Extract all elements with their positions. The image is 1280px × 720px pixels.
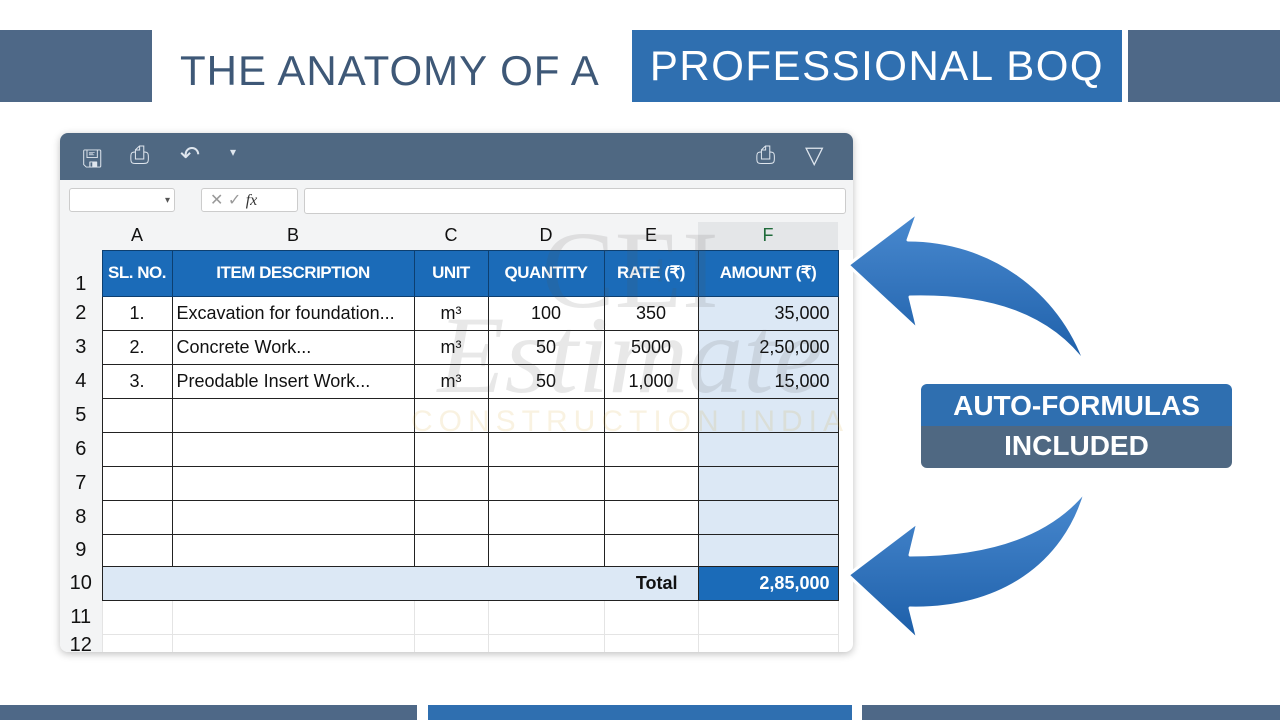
grid: RATE (₹) xyxy=(617,263,685,282)
grid: Preodable Insert Work... xyxy=(176,370,370,390)
grid: 2. xyxy=(129,336,144,356)
toolbar: ▾ xyxy=(230,145,236,159)
title highlight box xyxy=(632,30,1122,102)
spreadsheet window xyxy=(60,133,853,652)
grid: 3. xyxy=(129,370,144,390)
grid: 350 xyxy=(636,302,666,322)
toolbar: ⎙ xyxy=(130,142,149,169)
grid: 1 xyxy=(75,273,86,295)
grid: 8 xyxy=(75,506,86,528)
grid: 50 xyxy=(536,370,556,390)
toolbar: ▽ xyxy=(805,142,823,169)
toolbar: 🖫 xyxy=(82,146,102,173)
watermark xyxy=(411,209,849,438)
grid: Total xyxy=(636,572,678,592)
grid xyxy=(60,222,853,652)
grid: m³ xyxy=(440,336,462,356)
grid: QUANTITY xyxy=(505,263,587,282)
grid: 5 xyxy=(75,404,86,426)
toolbar: ↶ xyxy=(180,142,200,169)
formula bar: ✕ ✓ fx xyxy=(210,192,257,209)
arrow: lower xyxy=(848,490,1086,640)
arrows xyxy=(850,216,1082,636)
grid: m³ xyxy=(440,302,462,322)
grid: A xyxy=(131,225,143,245)
grid: 35,000 xyxy=(774,302,830,322)
grid: 2,85,000 xyxy=(759,572,830,592)
grid: SL. NO. xyxy=(108,263,166,282)
grid: ITEM DESCRIPTION xyxy=(216,263,370,282)
grid: 11 xyxy=(70,606,91,628)
grid: 50 xyxy=(536,336,556,356)
grid: 100 xyxy=(531,302,561,322)
grid: Excavation for foundation... xyxy=(176,302,395,322)
grid: 10 xyxy=(70,572,92,594)
title highlight box: PROFESSIONAL BOQ xyxy=(650,42,1104,89)
formula bar xyxy=(60,180,853,222)
grid: 1. xyxy=(129,302,144,322)
badge: auto-formulas: INCLUDED xyxy=(1004,430,1149,461)
toolbar xyxy=(60,133,853,180)
grid: D xyxy=(540,225,552,245)
grid: 1,000 xyxy=(628,370,674,390)
grid: UNIT xyxy=(432,263,470,282)
grid: 3 xyxy=(75,336,86,358)
badge: auto-formulas: AUTO-FORMULAS xyxy=(953,390,1200,421)
top bar right xyxy=(1128,30,1280,102)
top bar left xyxy=(0,30,152,102)
grid: 2 xyxy=(75,302,86,324)
title: THE ANATOMY OF A xyxy=(180,47,600,94)
toolbar: ⎙ xyxy=(756,142,775,169)
grid: 7 xyxy=(75,472,86,494)
grid: 4 xyxy=(75,370,86,392)
grid: 15,000 xyxy=(774,370,830,390)
grid: C xyxy=(444,225,458,245)
watermark: CEI xyxy=(541,209,719,331)
grid: m³ xyxy=(440,370,462,390)
formula bar: ▾ xyxy=(165,195,170,206)
grid: 2,50,000 xyxy=(759,336,830,356)
arrow: upper xyxy=(848,212,1086,365)
grid: 6 xyxy=(75,438,86,460)
grid: F xyxy=(762,225,774,245)
grid: 5000 xyxy=(631,336,671,356)
watermark: Estimate xyxy=(438,294,822,416)
watermark: CONSTRUCTION INDIA xyxy=(411,405,849,438)
grid: B xyxy=(287,225,299,245)
grid: Concrete Work... xyxy=(176,336,311,356)
grid: AMOUNT (₹) xyxy=(720,263,816,282)
grid: 9 xyxy=(75,538,86,560)
grid: E xyxy=(645,225,657,245)
bottom bars xyxy=(0,705,417,720)
badge: auto-formulas xyxy=(921,384,1232,468)
